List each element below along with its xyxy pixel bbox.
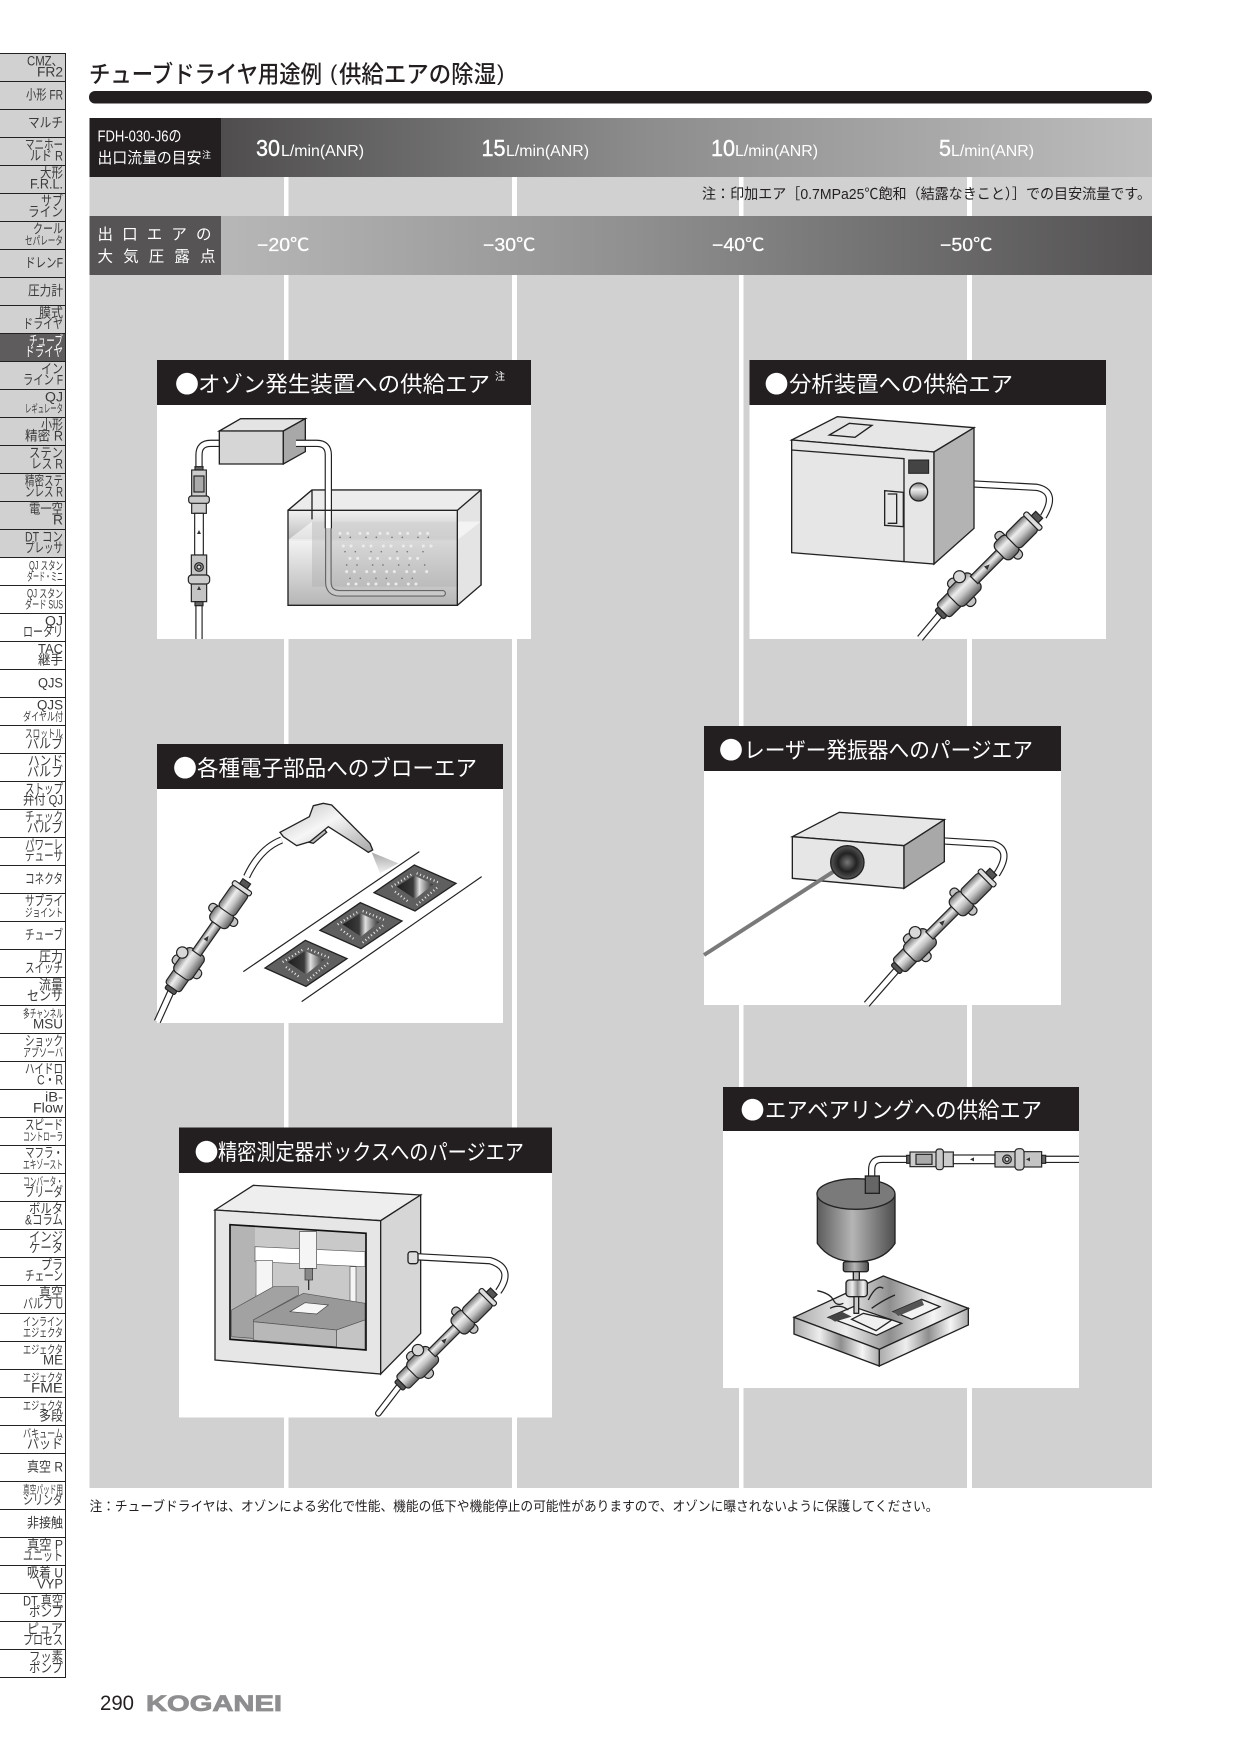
sidebar tabs: F.R.L. [30, 176, 63, 192]
sidebar tabs: QJS [37, 698, 63, 712]
sidebar tabs: 継手 [38, 652, 63, 668]
sidebar tabs: スピード [25, 1118, 63, 1132]
panel: laser oscillator: ● [719, 730, 743, 766]
sidebar tabs: FME [31, 1380, 63, 1396]
sidebar tabs: ステン [29, 446, 63, 460]
dew point row: −50℃ [940, 235, 992, 255]
sidebar tabs: 真空 R [27, 1460, 63, 1474]
sidebar tabs: 真空 [39, 1286, 63, 1300]
sidebar tabs: レギュレータ [25, 402, 63, 416]
sidebar tabs: ダード SUS [25, 598, 63, 612]
sidebar tabs: チェーン [25, 1268, 63, 1284]
sidebar tabs: 大形 [40, 166, 63, 180]
sidebar tabs: C・R [37, 1072, 63, 1088]
sidebar tabs: ケータ [29, 1240, 63, 1256]
sidebar tabs: MSU [33, 1016, 63, 1032]
sidebar tabs: チューブ [25, 926, 63, 942]
sidebar tabs: プラ [41, 1258, 63, 1272]
flow rate row: 10 [711, 135, 735, 161]
sidebar tabs: スロットル [25, 728, 63, 740]
sidebar tabs: ドライヤ [23, 316, 63, 332]
panel: ozone generator [157, 360, 531, 639]
panel: electronic parts blow: ● [173, 748, 197, 784]
sidebar tabs: DT コン [25, 530, 63, 544]
sidebar tabs: パワーレ [25, 838, 63, 852]
illustration: laser box and dryer [704, 812, 1005, 1004]
panel: laser oscillator: レーザー発振器へのパージエア [744, 738, 1033, 763]
illustration: analyzer box and dryer [792, 417, 1052, 638]
sidebar tabs: エキゾースト [23, 1158, 63, 1172]
sidebar tabs: CMZ、 [27, 54, 63, 68]
sidebar tabs: マニホー [25, 138, 63, 152]
sidebar tabs: パッド [27, 1436, 63, 1452]
sidebar tabs: 多チャンネル [23, 1006, 63, 1020]
sidebar tabs: 真空パッド用 [23, 1482, 63, 1496]
sidebar tabs: 精密 R [25, 428, 63, 444]
panel: air bearing: エアベアリングへの供給エア [765, 1098, 1042, 1123]
panel: ozone generator: オゾン発生装置への供給エア [198, 372, 490, 397]
sidebar tabs: 圧力 [39, 950, 63, 964]
sidebar tabs: &コラム [25, 1212, 63, 1228]
title: チューブドライヤ用途例 [89, 60, 322, 88]
title: ( [330, 60, 338, 86]
sidebar tabs: チェック [25, 810, 63, 824]
sidebar tabs [0, 53, 66, 1678]
panel: electronic parts blow [155, 744, 503, 1023]
flow rate row [90, 118, 1152, 177]
sidebar tabs: コンバータ・ [23, 1176, 63, 1188]
sidebar tabs: インジ [29, 1230, 63, 1244]
sidebar tabs: ルド R [30, 148, 63, 164]
panel: electronic parts blow: 各種電子部品へのブローエア [197, 756, 477, 781]
sidebar tabs: プレッサ [25, 540, 63, 556]
dew point row: −40℃ [712, 235, 764, 255]
sidebar tabs: シリンダ [23, 1492, 63, 1508]
sidebar tabs: QJ スタン [27, 588, 63, 600]
sidebar tabs: セパレータ [25, 234, 63, 248]
sidebar tabs: センサ [27, 988, 63, 1004]
panel: analyzer: ● [764, 364, 788, 400]
flow rate row: L/min(ANR) [281, 143, 364, 160]
sidebar tabs: マフラ・ [25, 1146, 63, 1160]
flow rate row: 注 [202, 149, 211, 160]
sidebar tabs: バルブ [27, 764, 63, 780]
flow rate row: 出口流量の目安 [98, 149, 202, 167]
panel: precision measuring box [179, 1128, 552, 1418]
panel: precision measuring box: ● [194, 1132, 218, 1168]
sidebar tabs: 小形 FR [26, 88, 63, 102]
sidebar tabs: コネクタ [25, 872, 63, 886]
panel: ozone generator: ● [175, 364, 199, 400]
sidebar tabs: ユニット [23, 1548, 63, 1564]
sidebar tabs: ポンプ [29, 1604, 63, 1620]
sidebar tabs: ボルタ [29, 1202, 63, 1216]
sidebar tabs: 膜式 [39, 306, 63, 320]
sidebar tabs: イン [41, 362, 63, 376]
flow rate row: L/min(ANR) [506, 143, 589, 160]
sidebar tabs: 真空 P [27, 1538, 63, 1552]
sidebar tabs: ポンプ [29, 1660, 63, 1676]
sidebar tabs: エジェクタ [23, 1326, 63, 1340]
sidebar tabs: 精密ステ [25, 474, 63, 488]
panel: laser oscillator [704, 726, 1061, 1005]
sidebar tabs: ダード・ミニ [27, 570, 63, 584]
panel: air bearing [723, 1087, 1079, 1388]
sidebar tabs: QJ [45, 390, 63, 404]
sidebar tabs: QJ [45, 614, 63, 628]
flow rate row: FDH-030-J6の [98, 128, 182, 146]
sidebar tabs: 多段 [39, 1408, 63, 1424]
title bar [89, 91, 1152, 104]
logo: KOGANEI: KOGANEI [146, 1691, 282, 1716]
sidebar tabs: QJS [38, 676, 63, 690]
panel: precision measuring box: 精密測定器ボックスへのパージエア [218, 1140, 524, 1165]
sidebar tabs: ハンド [28, 754, 63, 768]
title: 供給エアの除湿 [339, 62, 496, 88]
sidebar tabs: アブソーバ [23, 1046, 63, 1060]
footnote: 注：チューブドライヤは、オゾンによる劣化で性能、機能の低下や機能停止の可能性がありますので、オゾンに曝されないように保護してください。 [90, 1498, 938, 1514]
sidebar tabs: 非接触 [27, 1516, 63, 1530]
flow rate row: 5 [939, 135, 951, 161]
page number: 290 [100, 1692, 134, 1715]
grey chart background with column stripes [90, 118, 1152, 1488]
sidebar tabs: エジェクタ [23, 1400, 63, 1412]
flow rate row: 30 [256, 135, 280, 161]
sidebar tabs: エジェクタ [23, 1372, 63, 1384]
sidebar tabs: バルブ [27, 820, 63, 836]
sidebar tabs: FR2 [37, 64, 63, 80]
sidebar tabs: ライン [28, 204, 63, 220]
panel: analyzer [750, 360, 1106, 639]
sidebar tabs: デューサ [25, 848, 63, 864]
sidebar tabs: TAC [38, 642, 63, 656]
sidebar tabs: ショック [25, 1034, 63, 1048]
dew point row [90, 216, 1152, 275]
sidebar tabs: サプライ [25, 894, 63, 908]
sidebar tabs: コントローラ [23, 1132, 63, 1144]
sidebar tabs: サブ [41, 192, 63, 208]
sidebar tabs: ドレンF [25, 256, 63, 270]
sidebar tabs: ME [43, 1352, 63, 1368]
dew point row: −30℃ [483, 235, 536, 255]
panel: air bearing: ● [740, 1090, 764, 1126]
illustration: measuring box and dryer [215, 1185, 506, 1413]
sidebar tabs: 小形 [41, 418, 63, 432]
sidebar tabs: インライン [23, 1316, 63, 1328]
sidebar tabs: ブリーダ [25, 1184, 63, 1200]
panel: ozone generator: 注 [495, 370, 505, 383]
sidebar tabs: Flow [33, 1100, 63, 1116]
illustration: ozone generator, tank and dryer [188, 419, 481, 639]
sidebar tabs: ンレス R [25, 484, 63, 500]
sidebar tabs: ピュア [27, 1622, 63, 1636]
sidebar tabs: バルブ U [23, 1296, 63, 1312]
sidebar tabs: ダイヤル付 [23, 710, 63, 724]
sidebar tabs: スイッチ [25, 960, 63, 976]
sidebar tabs: ドライヤ [25, 344, 63, 360]
sidebar tabs: エジェクタ [23, 1344, 63, 1356]
illustration: air gun, chips and dryer [155, 803, 482, 1022]
sidebar tabs: ハイドロ [25, 1062, 63, 1076]
title [89, 60, 504, 88]
illustration: spindle, workpiece and dryer [794, 1149, 1079, 1366]
sidebar tabs: 流量 [39, 978, 63, 992]
sidebar tabs: レス R [31, 456, 63, 472]
flow rate row: L/min(ANR) [951, 143, 1034, 160]
sidebar tabs: ライン F [23, 372, 63, 388]
dew point row: 大気圧露点 [98, 248, 216, 266]
panel: analyzer: 分析装置への供給エア [789, 372, 1013, 397]
sidebar tabs: ストップ [25, 782, 63, 796]
sidebar tabs: iB- [45, 1090, 63, 1104]
sidebar tabs: 弁付 QJ [23, 792, 63, 808]
sidebar tabs: VYP [37, 1576, 63, 1592]
sidebar tabs: マルチ [28, 116, 63, 130]
sidebar tabs: チューブ [29, 332, 63, 348]
flow rate row: 15 [482, 135, 506, 161]
flow rate footnote: 注：印加エア［0.7MPa25℃飽和（結露なきこと）］での目安流量です。 [702, 186, 1151, 203]
sidebar tabs: 圧力計 [28, 284, 63, 298]
title: ) [497, 60, 504, 86]
sidebar tabs: バルブ [27, 736, 63, 752]
sidebar tabs: フッ素 [29, 1650, 63, 1664]
sidebar tabs: ジョイント [25, 908, 63, 920]
sidebar tabs: QJ スタン [29, 560, 63, 572]
sidebar tabs: プロセス [23, 1632, 63, 1648]
sidebar tabs: ロータリ [23, 624, 63, 640]
sidebar tabs: 電一空 [29, 502, 63, 516]
flow rate row: L/min(ANR) [735, 143, 818, 160]
dew point row: 出口エアの [98, 226, 212, 244]
sidebar tabs: 吸着 U [27, 1564, 63, 1580]
dew point row: −20℃ [257, 235, 310, 255]
sidebar tabs: DT 真空 [23, 1594, 63, 1608]
sidebar tabs: R [53, 512, 63, 528]
sidebar tabs: バキューム [23, 1428, 63, 1440]
sidebar tabs: クール [33, 222, 63, 236]
